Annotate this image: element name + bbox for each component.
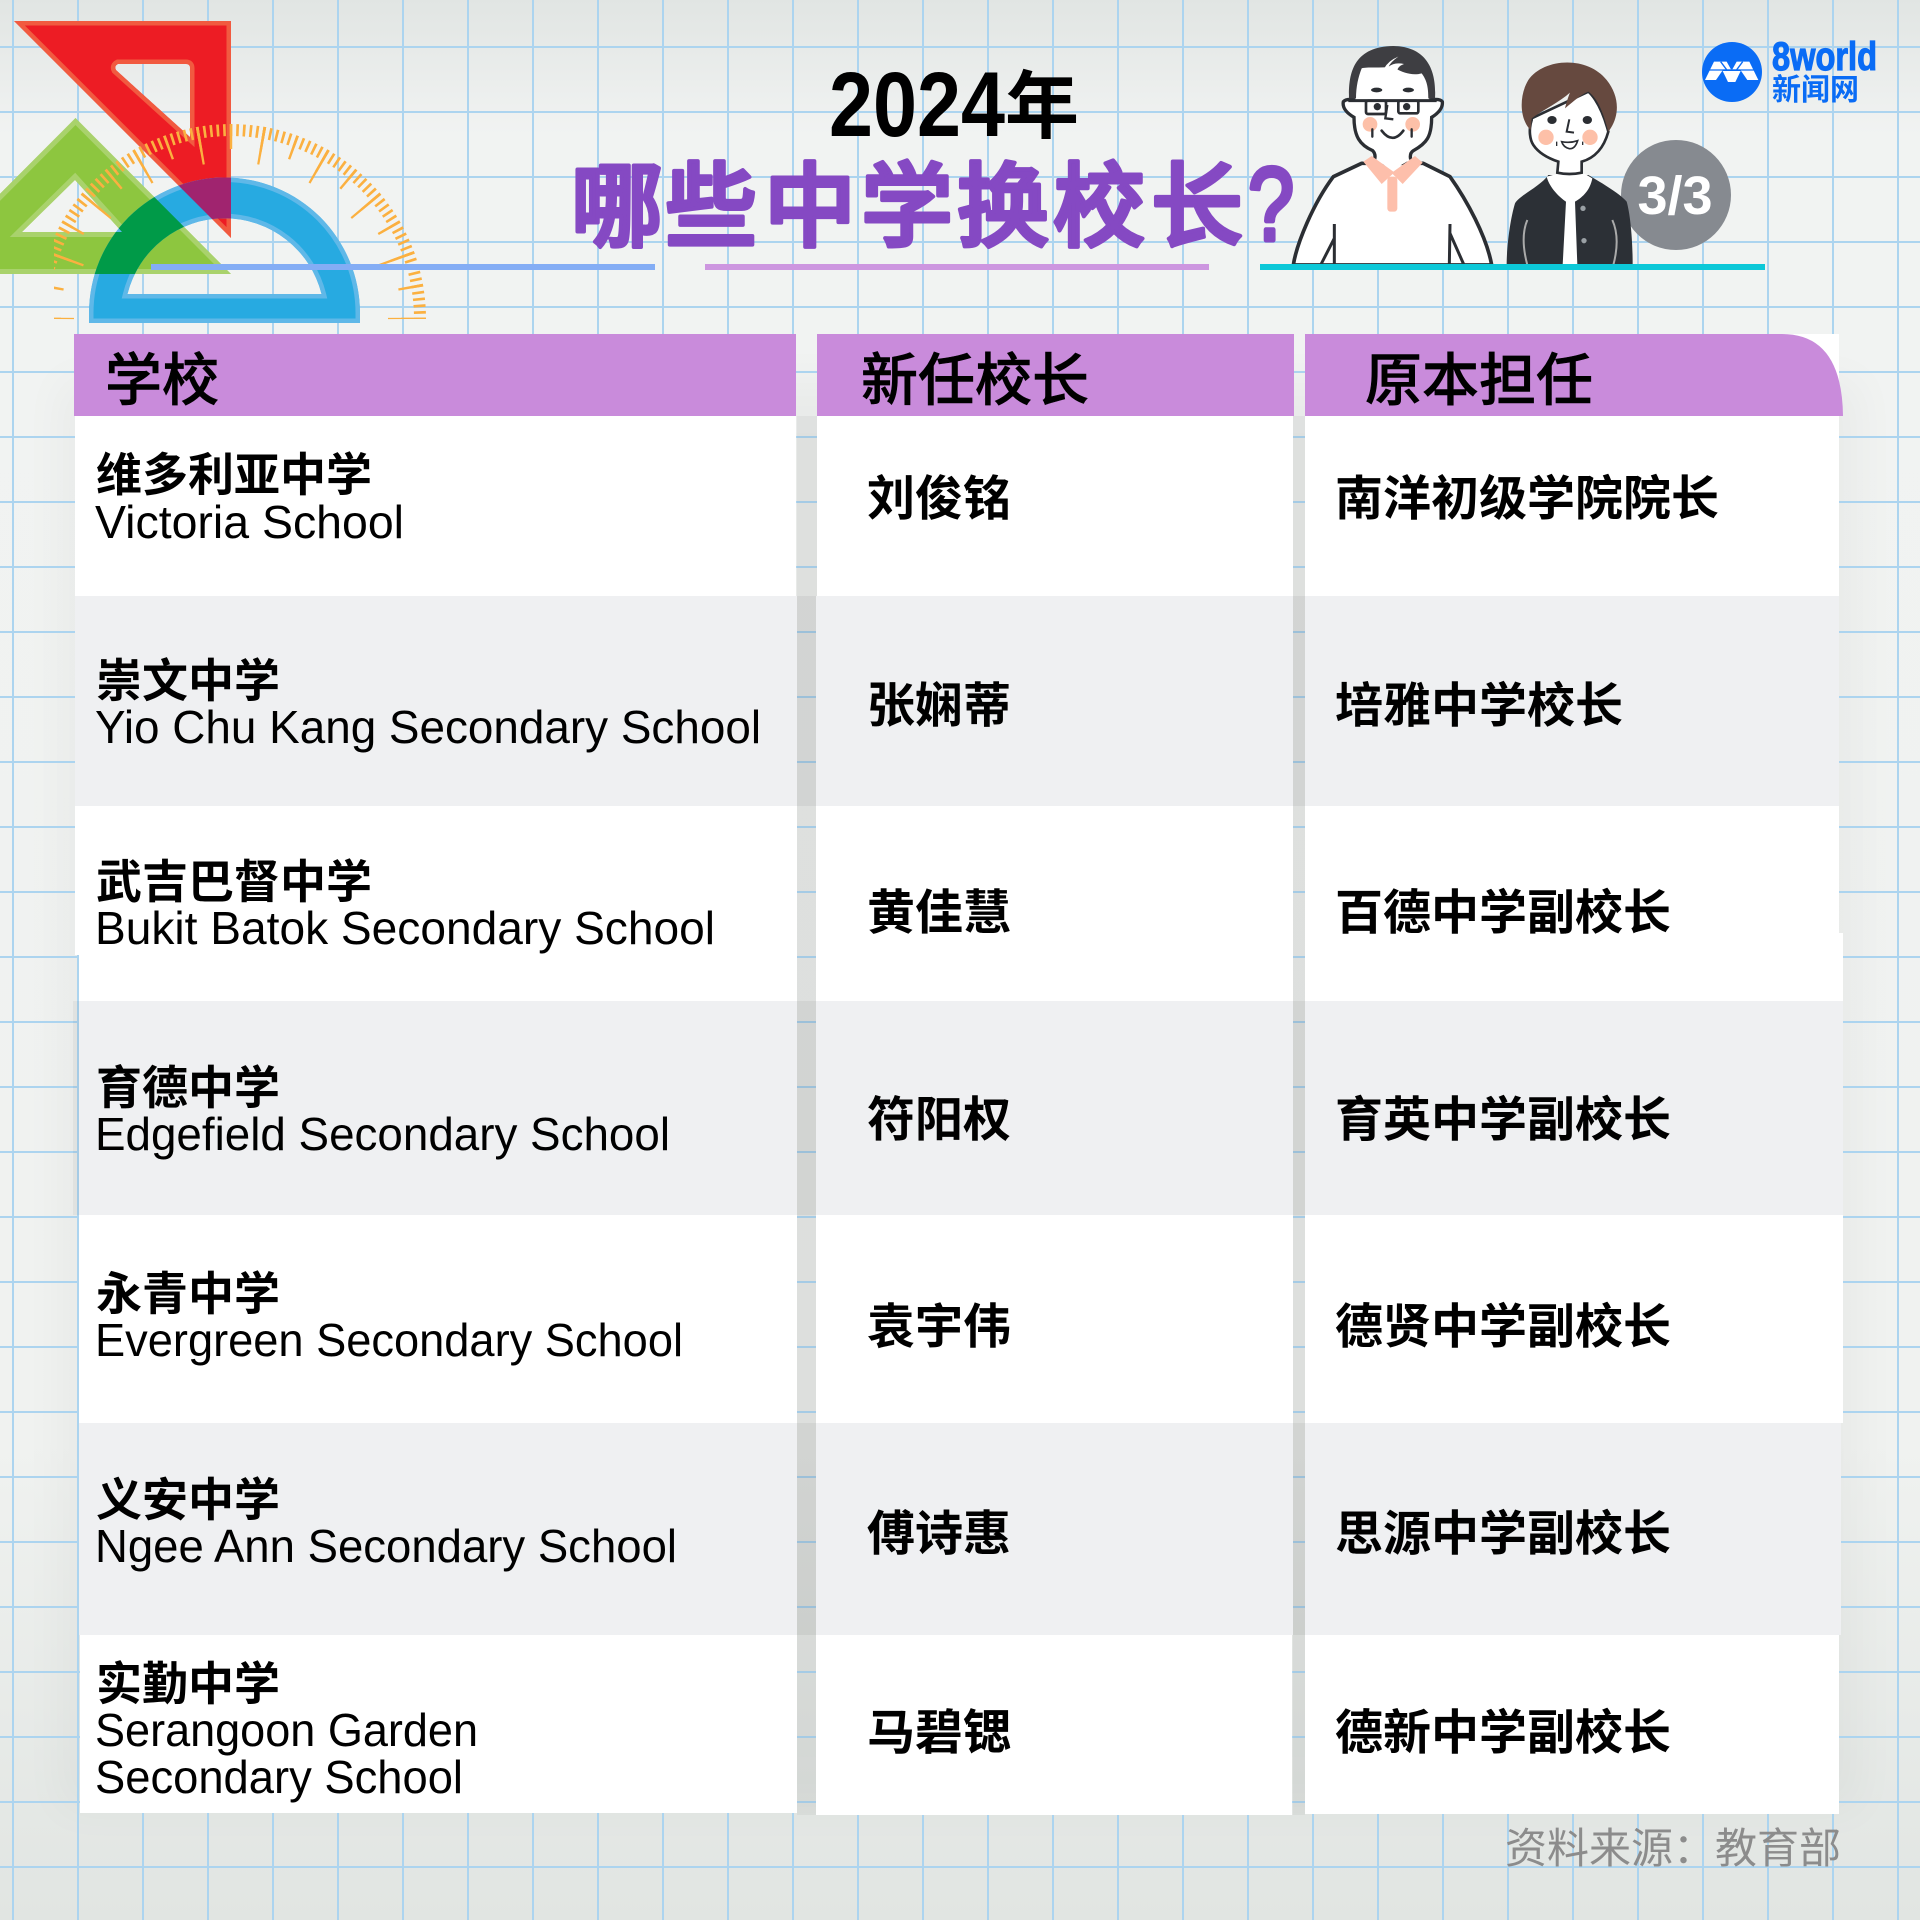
row: Victoria School: Victoria School <box>95 496 404 548</box>
row: Ngee Ann: 义安中学 <box>96 1474 280 1526</box>
row: Ngee Ann <box>79 1423 1841 1635</box>
row: Edgefield <box>73 1001 1843 1215</box>
divider line: blue <box>151 264 655 270</box>
row: Serangoon Garden: 德新中学副校长 <box>1335 1707 1671 1760</box>
logo: 8world: 8world <box>1772 35 1877 79</box>
blue protractor <box>89 178 360 323</box>
divider line: purple <box>705 264 1209 270</box>
green set square <box>0 118 231 274</box>
row: Bukit Batok: 黄佳慧 <box>867 887 1011 940</box>
protractor overlap with green <box>94 197 184 274</box>
illustration: man with glasses <box>1293 46 1492 265</box>
row: Serangoon Garden <box>80 1635 1839 1815</box>
row: Serangoon Garden: 马碧锶 <box>867 1707 1011 1760</box>
row: Victoria School <box>75 416 1839 596</box>
source note: 资料来源：教育部 <box>1505 1825 1841 1872</box>
row: Victoria School: 维多利亚中学 <box>96 449 372 501</box>
illustration: woman in dark jacket <box>1507 62 1633 265</box>
logo: 8world <box>1702 35 1877 107</box>
row: Bukit Batok <box>75 806 1843 1001</box>
row: Serangoon Garden: Secondary School <box>95 1751 463 1803</box>
title: year: 2024 <box>829 54 1005 156</box>
header row: 原本担任 <box>1365 349 1593 413</box>
row: Evergreen: 德贤中学副校长 <box>1335 1301 1671 1354</box>
row: Yio Chu Kang: 崇文中学 <box>96 655 280 707</box>
icon: geometry set rulers and protractor <box>0 21 420 323</box>
row: Evergreen: Evergreen Secondary School <box>95 1314 683 1366</box>
row: Victoria School: 刘俊铭 <box>867 473 1011 526</box>
row: Edgefield: 育德中学 <box>96 1062 280 1114</box>
row: Edgefield: Edgefield Secondary School <box>95 1108 670 1160</box>
badge: page 3/3 <box>1621 140 1731 250</box>
header row: 学校 <box>105 349 219 413</box>
row: Bukit Batok: 武吉巴督中学 <box>96 856 372 908</box>
row: Bukit Batok: Bukit Batok Secondary School <box>95 902 715 954</box>
row: Yio Chu Kang: 培雅中学校长 <box>1335 680 1623 733</box>
column gaps <box>797 416 1305 1815</box>
header row: 新任校长 <box>861 349 1089 413</box>
protractor overlap with red <box>178 178 231 220</box>
row: Evergreen: 永青中学 <box>96 1268 280 1320</box>
row: Serangoon Garden: 实勤中学 <box>96 1658 280 1710</box>
title: question: ? <box>1248 147 1294 263</box>
row: Yio Chu Kang <box>75 596 1839 806</box>
row: Edgefield: 育英中学副校长 <box>1335 1094 1671 1147</box>
row: Ngee Ann: 思源中学副校长 <box>1335 1508 1671 1561</box>
row: Ngee Ann: 傅诗惠 <box>867 1508 1011 1561</box>
divider line: cyan <box>1260 264 1765 270</box>
red set square <box>14 21 231 238</box>
protractor tick marks <box>42 130 420 319</box>
logo: 8world: 新闻网 <box>1772 74 1859 107</box>
row: Yio Chu Kang: 张娴蒂 <box>867 680 1011 733</box>
title: question: 哪些中学换校长 <box>571 157 1243 259</box>
badge: page 3/3: 3/3 <box>1637 166 1713 226</box>
row: Serangoon Garden: Serangoon Garden <box>95 1704 478 1756</box>
row: Edgefield: 符阳权 <box>867 1094 1011 1147</box>
row: Yio Chu Kang: Yio Chu Kang Secondary School <box>95 701 761 753</box>
row: Victoria School: 南洋初级学院院长 <box>1335 473 1719 526</box>
row: Bukit Batok: 百德中学副校长 <box>1335 887 1671 940</box>
row: Evergreen: 袁宇伟 <box>867 1301 1011 1354</box>
title: year: 年 <box>1005 65 1079 148</box>
header row <box>74 334 1843 416</box>
row: Ngee Ann: Ngee Ann Secondary School <box>95 1520 677 1572</box>
row: Evergreen <box>79 1215 1843 1423</box>
table <box>73 334 1843 1815</box>
